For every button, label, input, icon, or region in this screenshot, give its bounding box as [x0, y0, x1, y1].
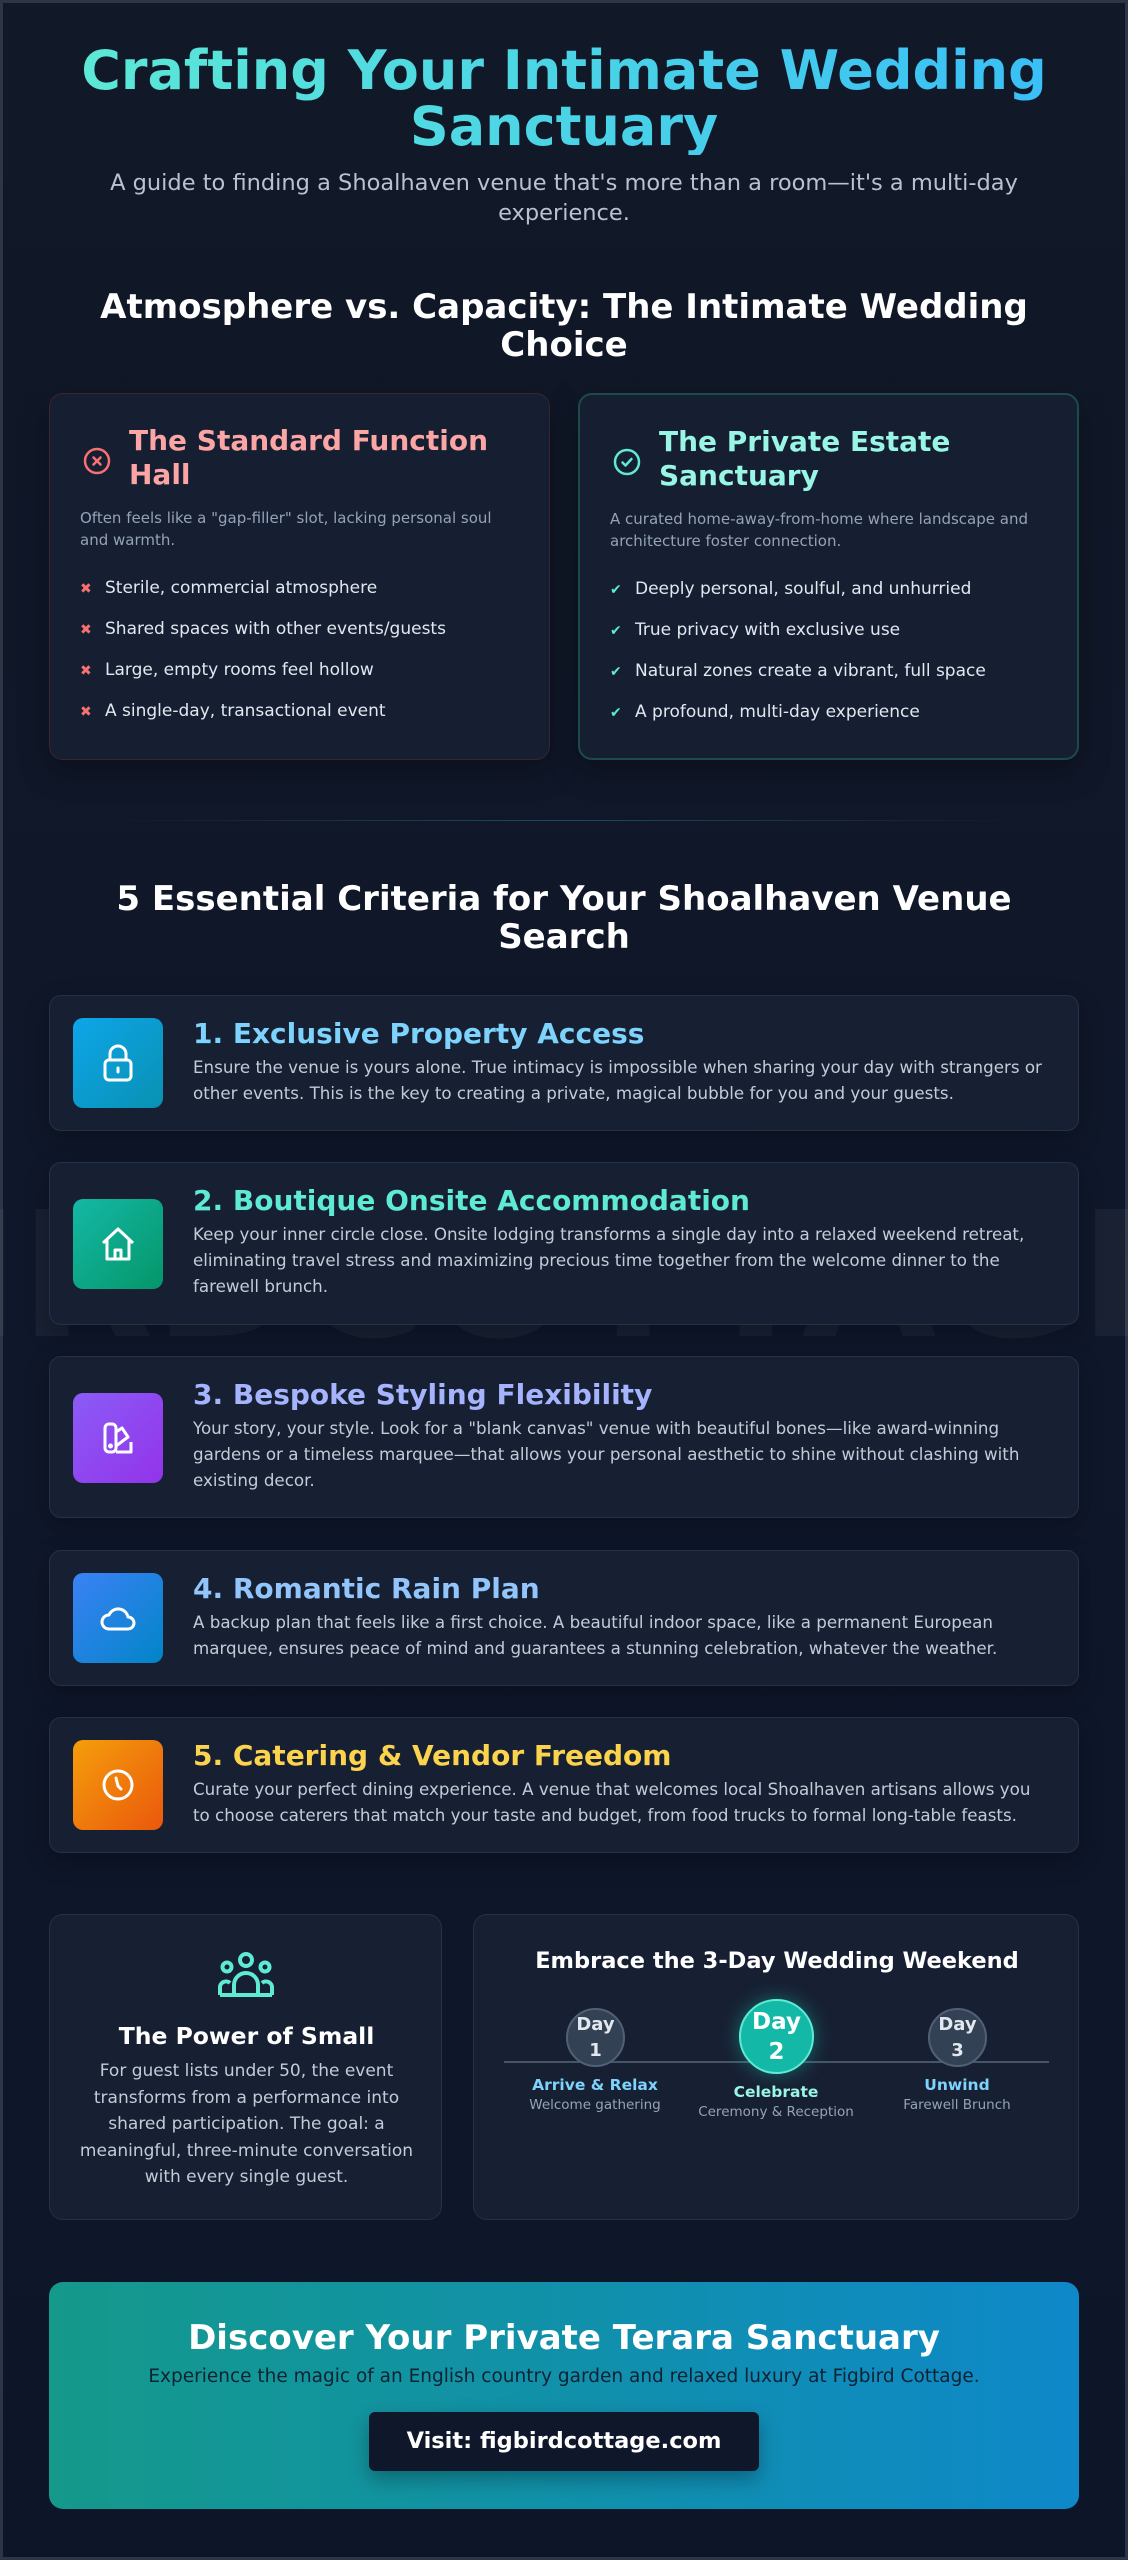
timeline — [504, 1990, 1049, 2120]
list: negatives: Large, empty rooms feel hollow — [105, 660, 374, 680]
day 2: 2 — [768, 2038, 784, 2064]
list: positives: ✔ — [610, 623, 622, 639]
list: negatives: ✖ — [80, 622, 92, 638]
list: positives: ✔ — [610, 705, 622, 721]
day 3: 3 — [951, 2040, 964, 2060]
label 2 — [698, 2083, 854, 2120]
panel: power of small — [49, 1914, 442, 2220]
day 2: Day — [752, 2008, 801, 2034]
day 1: Day — [576, 2014, 615, 2034]
icon: group of people — [218, 1952, 274, 1997]
heading: The Standard Function Hall — [129, 424, 488, 491]
text: For guest lists under 50, the event transforms from a performance into shared participation. The goal: a meaningful, three-minute conversation with every single guest. — [80, 2061, 413, 2187]
heading: The Private Estate Sanctuary — [659, 425, 950, 492]
icon: x circle — [84, 448, 110, 474]
button: Visit: figbirdcottage.com — [407, 2428, 721, 2454]
list: negatives — [80, 578, 446, 721]
list: negatives: Sterile, commercial atmosphere — [105, 578, 377, 598]
label 3: Unwind — [924, 2076, 990, 2094]
list: negatives: Shared spaces with other events/guests — [105, 619, 446, 639]
label 1: Welcome gathering — [529, 2097, 661, 2113]
list: negatives: ✖ — [80, 704, 92, 720]
heading: atmosphere vs capacity: Atmosphere vs. Capacity: The Intimate Wedding Choice — [100, 287, 1028, 365]
button — [369, 2412, 759, 2471]
cta text: Experience the magic of an English country garden and relaxed luxury at Figbird Cottage. — [148, 2366, 980, 2387]
cta heading: Discover Your Private Terara Sanctuary — [188, 2318, 940, 2358]
criterion 5 — [49, 1717, 1079, 1853]
day 3 — [928, 2008, 987, 2067]
subtitle: A guide to finding a Shoalhaven venue that's more than a room—it's a multi-day experience. — [110, 170, 1018, 226]
list: positives: ✔ — [610, 664, 622, 680]
description: A curated home-away-from-home where landscape and architecture foster connection. — [610, 510, 1028, 550]
heading: Embrace the 3-Day Wedding Weekend — [535, 1948, 1019, 1974]
criterion 4 — [49, 1550, 1079, 1686]
label 1 — [529, 2076, 661, 2113]
icon: lock — [73, 1018, 163, 1108]
label 2: Celebrate — [734, 2083, 818, 2101]
label 2: Ceremony & Reception — [698, 2104, 854, 2120]
panel: standard function hall — [49, 393, 550, 760]
icon: palette swatch — [73, 1393, 163, 1483]
criterion 1: Ensure the venue is yours alone. True intimacy is impossible when sharing your day with strangers or other events. This is the key to creating a private, magical bubble for you and your guests. — [193, 1057, 1042, 1103]
list: negatives: A single-day, transactional event — [105, 701, 386, 721]
list: positives: A profound, multi-day experience — [635, 702, 920, 722]
list: positives: Deeply personal, soulful, and unhurried — [635, 579, 971, 599]
icon: check circle — [614, 448, 640, 476]
list: negatives: ✖ — [80, 581, 92, 597]
criterion 2: 2. Boutique Onsite Accommodation — [193, 1184, 750, 1217]
heading: The Power of Small — [119, 2022, 374, 2050]
icon: clock — [73, 1740, 163, 1830]
list: positives: ✔ — [610, 582, 622, 598]
list: positives — [610, 579, 986, 722]
criterion 3: 3. Bespoke Styling Flexibility — [193, 1378, 652, 1411]
icon: cloud — [73, 1573, 163, 1663]
criterion 1 — [49, 995, 1079, 1131]
title: Crafting Your Intimate Wedding Sanctuary — [81, 39, 1047, 158]
criterion 5: Curate your perfect dining experience. A venue that welcomes local Shoalhaven artisans allows you to choose caterers that match your taste and budget, from food trucks to formal long-table feasts. — [193, 1779, 1030, 1825]
day 1 — [566, 2008, 625, 2067]
label 3 — [903, 2076, 1011, 2113]
day 3: Day — [938, 2014, 977, 2034]
criterion 1: 1. Exclusive Property Access — [193, 1017, 644, 1050]
criterion 2: Keep your inner circle close. Onsite lodging transforms a single day into a relaxed weekend retreat, eliminating travel stress and maximizing precious time together from the welcome dinner to the farewell brunch. — [193, 1224, 1024, 1296]
criterion 4: 4. Romantic Rain Plan — [193, 1572, 540, 1605]
label 3: Farewell Brunch — [903, 2097, 1011, 2113]
heading: 5 criteria: 5 Essential Criteria for Your Shoalhaven Venue Search — [116, 879, 1012, 957]
panel: private estate sanctuary — [578, 393, 1079, 760]
day 1: 1 — [589, 2040, 602, 2060]
icon: house — [73, 1199, 163, 1289]
list: negatives: ✖ — [80, 663, 92, 679]
panel: 3-day wedding weekend — [473, 1914, 1079, 2220]
label 1: Arrive & Relax — [532, 2076, 658, 2094]
criterion 5: 5. Catering & Vendor Freedom — [193, 1739, 671, 1772]
criterion 2 — [49, 1162, 1079, 1325]
criterion 3: Your story, your style. Look for a "blank canvas" venue with beautiful bones—like award-winning gardens or a timeless marquee—that allows your personal aesthetic to shine without clashing with existing decor. — [193, 1418, 1019, 1490]
day 2 — [739, 1999, 814, 2074]
criterion 3 — [49, 1356, 1079, 1518]
call to action — [49, 2282, 1079, 2509]
criterion 4: A backup plan that feels like a first choice. A beautiful indoor space, like a permanent European marquee, ensures peace of mind and guarantees a stunning celebration, whatever the weather. — [193, 1612, 997, 1658]
list: positives: True privacy with exclusive use — [635, 620, 900, 640]
list: positives: Natural zones create a vibrant, full space — [635, 661, 986, 681]
description: Often feels like a "gap-filler" slot, lacking personal soul and warmth. — [80, 509, 492, 549]
